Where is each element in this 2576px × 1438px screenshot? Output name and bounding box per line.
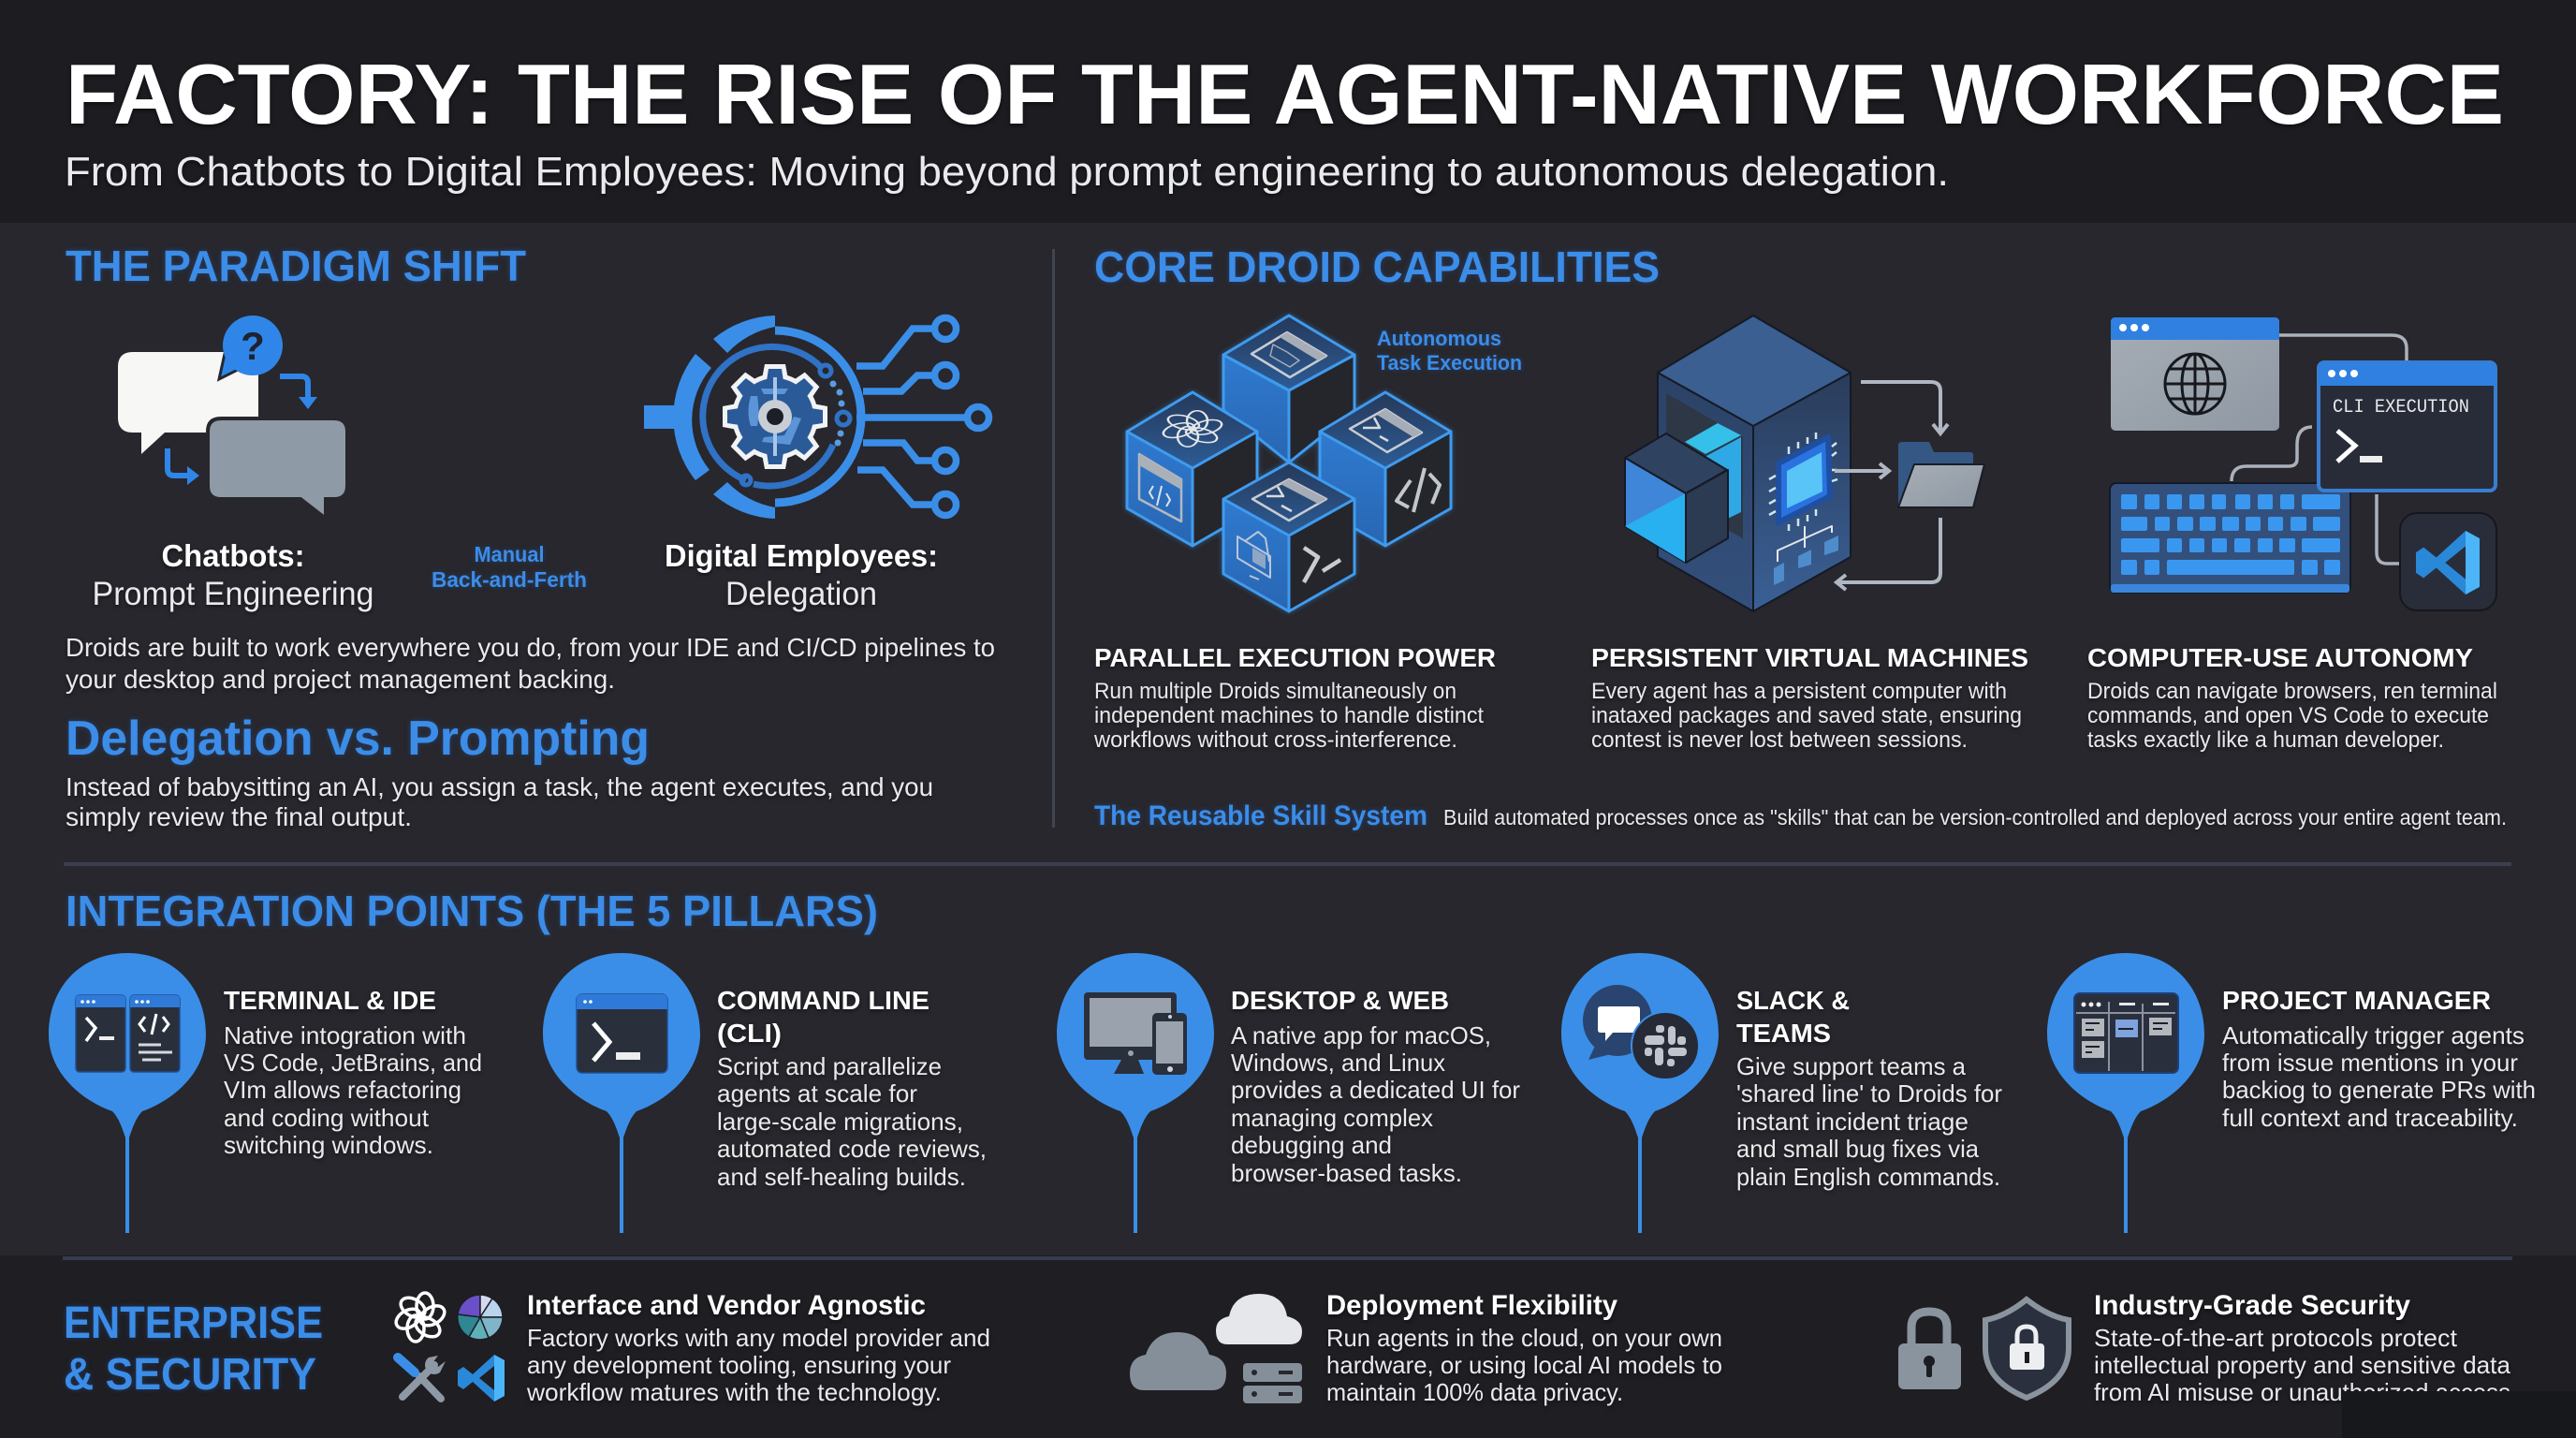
keyboard — [2110, 483, 2350, 593]
pillar: command line: agents at scale for — [717, 1079, 917, 1108]
icon: chat bubbles — [118, 315, 347, 519]
pillar: slack and teams: and small bug fixes via — [1736, 1135, 1980, 1163]
column: parallel execution power: PARALLEL EXECUTION POWER — [1094, 643, 1496, 672]
chip — [1778, 437, 1830, 522]
label: digital employees: Delegation — [725, 576, 877, 612]
pillar: project manager: PROJECT MANAGER — [2222, 986, 2491, 1015]
label: manual back-and-forth: Back-and-Ferth — [432, 567, 587, 592]
label: chatbots — [92, 538, 374, 612]
text: interface and vendor agnostic: workflow matures with the technology. — [526, 1378, 942, 1406]
pillar: command line: Script and parallelize — [717, 1052, 942, 1080]
pillar: desktop and web: A native app for macOS, — [1231, 1021, 1491, 1049]
pillar: slack and teams: plain English commands. — [1736, 1163, 2000, 1191]
column: persistent virtual machines: inataxed packages and saved state, ensuring — [1591, 703, 2022, 728]
pillar: project manager: backiog to generate PRs with — [2222, 1076, 2536, 1104]
column: persistent virtual machines: PERSISTENT VIRTUAL MACHINES — [1591, 643, 2028, 672]
text: industry-grade security: State-of-the-art protocols protect — [2094, 1324, 2458, 1352]
arrows and folder: persistent storage — [1835, 382, 1984, 590]
label: chatbots: Chatbots: — [161, 538, 305, 573]
protruding cube — [1625, 433, 1728, 563]
icons: clouds and server — [1130, 1294, 1302, 1403]
heading: the paradigm shift: THE PARADIGM SHIFT — [66, 242, 526, 290]
panel: integration points — [49, 887, 2536, 1233]
pillar: project manager — [2047, 953, 2536, 1233]
callout: reusable skill system — [1094, 800, 2507, 831]
text block: droids intro — [66, 633, 995, 694]
pin: desktop and web — [1057, 953, 1214, 1233]
pillar: desktop and web: Windows, and Linux — [1231, 1049, 1445, 1077]
heading: delegation vs prompting: Delegation vs. Prompting — [66, 712, 650, 766]
icon: computer-use setup — [2110, 317, 2496, 610]
icon: VS Code tile — [2400, 513, 2496, 610]
pillar: terminal and IDE: switching windows. — [224, 1131, 433, 1159]
pillar: terminal and IDE: Native intogration with — [224, 1021, 466, 1049]
panel: enterprise and security — [64, 1290, 2576, 1438]
label: autonomous task execution: Task Execution — [1377, 351, 1522, 374]
label: autonomous task execution — [1377, 327, 1522, 374]
icons: vendor logos and tools — [392, 1293, 505, 1401]
column: persistent virtual machines: contest is never lost between sessions. — [1591, 727, 1968, 753]
pillar: terminal and IDE: and coding without — [224, 1104, 430, 1132]
column: parallel execution power: independent machines to handle distinct — [1094, 703, 1484, 728]
text: deployment flexibility: maintain 100% data privacy. — [1326, 1378, 1623, 1406]
text: interface and vendor agnostic: Factory works with any model provider and — [527, 1324, 990, 1352]
label: digital employees — [665, 538, 938, 612]
column: computer-use autonomy: commands, and open VS Code to execute — [2087, 703, 2489, 728]
text: industry-grade security: Industry-Grade Security — [2094, 1290, 2410, 1321]
label: manual back-and-forth: Manual — [474, 542, 545, 566]
pin: terminal and IDE — [49, 953, 206, 1233]
text: industry-grade security: from AI misuse or unauthorized access — [2094, 1378, 2510, 1406]
pillar: terminal and IDE: TERMINAL & IDE — [224, 986, 436, 1015]
text: deployment flexibility: hardware, or using local AI models to — [1326, 1351, 1722, 1379]
header — [65, 48, 2504, 195]
pillar: slack and teams: Give support teams a — [1736, 1052, 1967, 1080]
pillar: desktop and web: debugging and — [1231, 1131, 1392, 1159]
terminal window: CLI execution — [2319, 362, 2496, 491]
column: persistent virtual machines: Every agent has a persistent computer with — [1591, 679, 2007, 704]
column: parallel execution power: Run multiple Droids simultaneously on — [1094, 679, 1456, 704]
pin: project manager — [2047, 953, 2204, 1233]
text block: droids intro: your desktop and project management backing. — [66, 665, 615, 694]
label: autonomous task execution: Autonomous — [1377, 327, 1501, 350]
label: digital employees: Digital Employees: — [665, 538, 938, 573]
browser window — [2111, 317, 2279, 431]
text: deployment flexibility — [1326, 1290, 1722, 1406]
column: persistent virtual machines — [1591, 643, 2028, 753]
icon: parallel cubes — [1127, 315, 1451, 611]
pillar: command line — [543, 953, 987, 1233]
subtitle: From Chatbots to Digital Employees: Moving beyond prompt engineering to autonomous delegation. — [65, 149, 1949, 195]
text block: delegation explanation: simply review the final output. — [66, 802, 412, 831]
panel: core droid capabilities — [1093, 242, 2507, 831]
pillar: command line: and self-healing builds. — [717, 1163, 966, 1191]
callout: reusable skill system: The Reusable Skill System — [1094, 800, 1427, 831]
column: computer-use autonomy: COMPUTER-USE AUTONOMY — [2087, 643, 2473, 672]
pillar: slack and teams: 'shared line' to Droids for — [1736, 1079, 2002, 1108]
pillar: command line: (CLI) — [717, 1019, 782, 1048]
cube: top — [1223, 315, 1354, 462]
cube: front — [1223, 462, 1354, 611]
pillar: project manager: full context and traceability. — [2222, 1104, 2518, 1132]
pillar: desktop and web: DESKTOP & WEB — [1231, 986, 1449, 1015]
pillar: project manager: from issue mentions in your — [2222, 1049, 2518, 1077]
pillar: desktop and web: managing complex — [1231, 1104, 1433, 1132]
icon: gear with circuit — [644, 315, 988, 519]
text: deployment flexibility: Deployment Flexibility — [1326, 1290, 1617, 1321]
pillar: command line: COMMAND LINE — [717, 986, 929, 1015]
column: computer-use autonomy: tasks exactly like a human developer. — [2087, 727, 2444, 753]
column: computer-use autonomy — [2087, 643, 2497, 753]
pillar: project manager: Automatically trigger agents — [2222, 1021, 2525, 1049]
text block: droids intro: Droids are built to work everywhere you do, from your IDE and CI/CD pipelines to — [66, 633, 995, 662]
title: FACTORY: THE RISE OF THE AGENT-NATIVE WORKFORCE — [66, 48, 2504, 142]
text: industry-grade security: intellectual property and sensitive data — [2094, 1351, 2511, 1379]
text: industry-grade security — [2094, 1290, 2511, 1406]
pin: command line — [543, 953, 700, 1233]
icon: chat bubbles: ? — [241, 324, 265, 368]
heading: enterprise and security: ENTERPRISE — [64, 1299, 323, 1348]
pillar: command line: large-scale migrations, — [717, 1108, 963, 1136]
pin: slack and teams — [1561, 953, 1719, 1233]
text: interface and vendor agnostic: any development tooling, ensuring your — [527, 1351, 951, 1379]
column: computer-use autonomy: Droids can navigate browsers, ren terminal — [2087, 679, 2497, 704]
text: interface and vendor agnostic — [526, 1290, 990, 1406]
pillar: slack and teams: SLACK & — [1736, 986, 1850, 1015]
heading: enterprise and security: & SECURITY — [64, 1350, 316, 1400]
heading: integration points: INTEGRATION POINTS (THE 5 PILLARS) — [66, 887, 878, 935]
pillar: terminal and IDE: VS Code, JetBrains, and — [224, 1049, 482, 1077]
panel: the paradigm shift — [66, 242, 995, 831]
text: deployment flexibility: Run agents in the cloud, on your own — [1326, 1324, 1722, 1352]
pillar: slack and teams: TEAMS — [1736, 1019, 1831, 1048]
cube: right — [1320, 392, 1451, 546]
pillar: desktop and web — [1057, 953, 1520, 1233]
column: parallel execution power: workflows without cross-interference. — [1093, 727, 1457, 753]
label: chatbots: Prompt Engineering — [92, 576, 374, 612]
text: interface and vendor agnostic: Interface and Vendor Agnostic — [527, 1290, 926, 1321]
pillar: terminal and IDE — [49, 953, 482, 1233]
text block: delegation explanation — [66, 772, 933, 831]
pillar: terminal and IDE: VIm allows refactoring — [224, 1076, 461, 1104]
callout: reusable skill system: Build automated processes once as "skills" that can be version-controlled and deployed across your entire agent team. — [1443, 805, 2507, 829]
terminal window: CLI execution: CLI EXECUTION — [2333, 397, 2469, 418]
pillar: slack and teams — [1561, 953, 2002, 1233]
pillar: slack and teams: instant incident triage — [1736, 1108, 1969, 1136]
pillar: desktop and web: browser-based tasks. — [1231, 1159, 1462, 1187]
icons: lock and shield — [1898, 1299, 2069, 1398]
icon: persistent virtual machine — [1625, 315, 1851, 611]
heading: core droid capabilities: CORE DROID CAPABILITIES — [1094, 242, 1660, 291]
heading: enterprise and security — [64, 1299, 323, 1400]
pillar: desktop and web: provides a dedicated UI for — [1231, 1076, 1520, 1104]
column: parallel execution power — [1093, 643, 1496, 753]
pillar: command line: automated code reviews, — [717, 1135, 987, 1163]
text block: delegation explanation: Instead of babysitting an AI, you assign a task, the agent executes, and you — [66, 772, 933, 801]
label: manual back-and-forth — [432, 542, 587, 592]
cube: left — [1127, 392, 1257, 546]
